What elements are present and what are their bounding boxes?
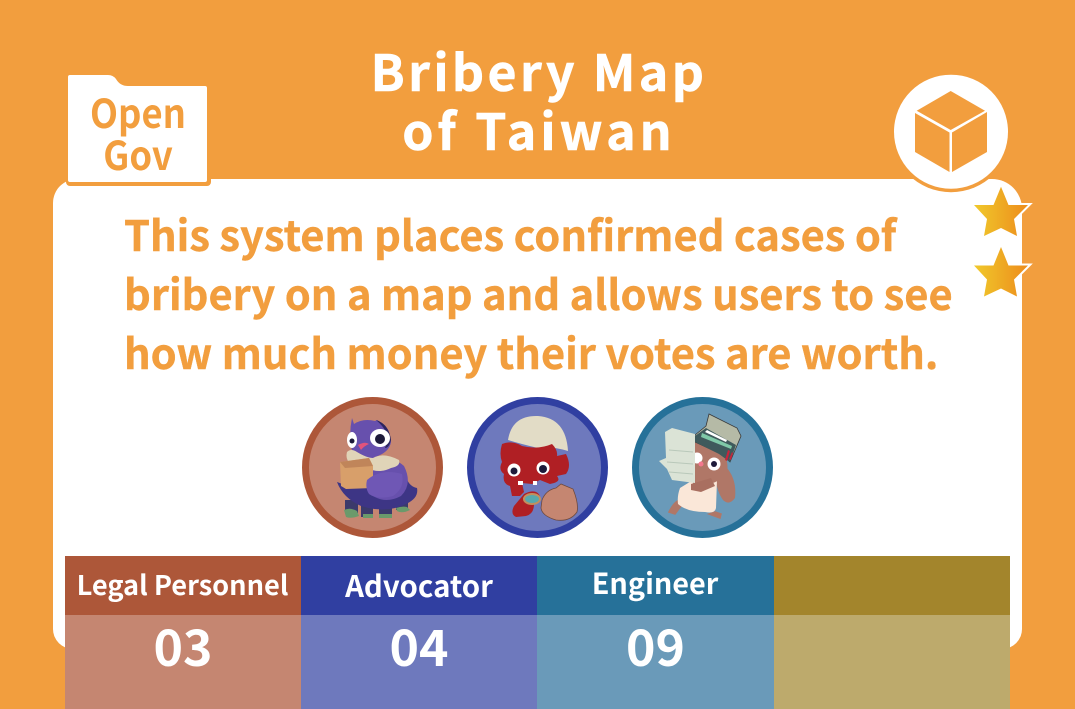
header: empty olive bbox=[774, 556, 1010, 615]
column: empty olive bbox=[774, 556, 1010, 709]
header: Legal Personnel bbox=[65, 556, 300, 615]
icon: stars bbox=[974, 186, 1033, 296]
text block: description: This system places confirmed cases of bbox=[124, 203, 896, 263]
icon: Open Gov folder tab: Open bbox=[90, 83, 186, 141]
title: Bribery Map bbox=[371, 34, 707, 106]
icon: purple character with box bbox=[302, 397, 443, 538]
panel: white content card bbox=[53, 179, 1022, 649]
header: Engineer bbox=[537, 556, 773, 615]
header: Advocator bbox=[301, 556, 537, 615]
icon: red character with bag bbox=[467, 397, 608, 538]
header: Engineer: Engineer bbox=[592, 562, 718, 603]
title bbox=[371, 34, 707, 165]
text block: description: how much money their votes are worth. bbox=[124, 321, 938, 381]
header: Legal Personnel: Legal Personnel bbox=[77, 563, 288, 603]
number: 04: 04 bbox=[390, 609, 448, 681]
text block: description bbox=[124, 203, 953, 381]
column: Engineer bbox=[537, 556, 774, 709]
icon: Open Gov folder tab bbox=[66, 75, 211, 186]
number: 09: 09 bbox=[626, 609, 685, 681]
header: Advocator: Advocator bbox=[345, 564, 493, 606]
column: Advocator bbox=[301, 556, 537, 709]
icon: Open Gov folder tab: Gov bbox=[103, 125, 173, 183]
icon: character with paper stack bbox=[632, 397, 773, 538]
icon: cube badge bbox=[894, 74, 1008, 192]
text block: description: bribery on a map and allows users to see bbox=[124, 262, 953, 322]
table: role categories bbox=[65, 556, 1010, 709]
number: 03: 03 bbox=[154, 609, 212, 681]
title: of Taiwan bbox=[402, 93, 676, 165]
column: Legal Personnel bbox=[65, 556, 301, 709]
